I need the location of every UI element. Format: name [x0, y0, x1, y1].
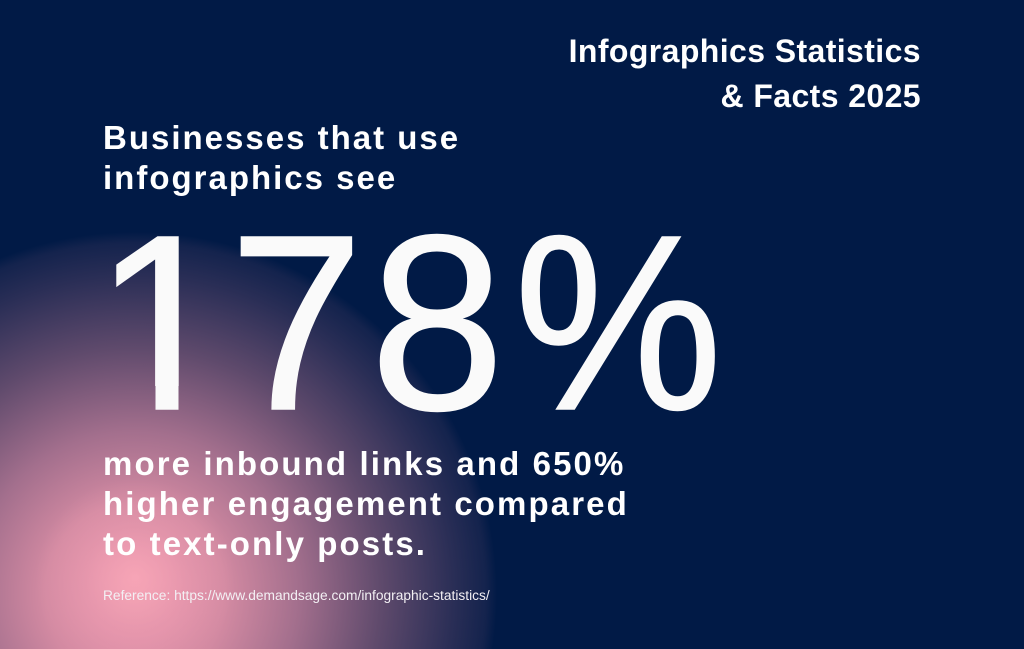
reference: Reference: https://www.demandsage.com/infographic-statistics/ [103, 588, 490, 603]
big statistic [116, 183, 723, 462]
big statistic: 8 [370, 183, 505, 462]
intro text: infographics see [103, 159, 397, 196]
intro text: Businesses that use [103, 119, 460, 156]
big statistic: % [514, 183, 723, 462]
title: & Facts 2025 [721, 78, 921, 114]
description text: higher engagement compared [103, 485, 629, 522]
title [569, 33, 921, 114]
big statistic: 1 [93, 183, 232, 462]
description text [103, 445, 629, 562]
description text: more inbound links and 650% [103, 445, 625, 482]
description text: to text-only posts. [103, 525, 427, 562]
intro text [103, 119, 460, 196]
title: Infographics Statistics [569, 33, 921, 69]
big statistic: 7 [229, 183, 364, 462]
